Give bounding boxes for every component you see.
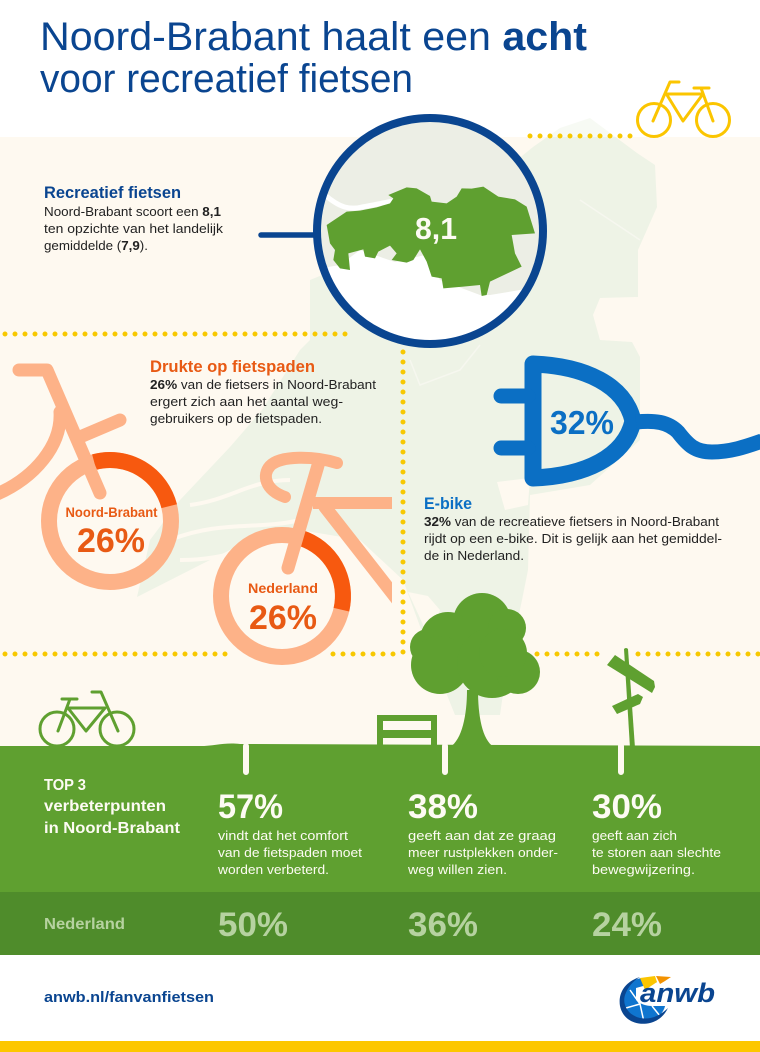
item: 57% comfort	[217, 788, 362, 877]
text: e-bike: de in Nederland.	[424, 548, 524, 563]
icon: e-bike plug	[501, 364, 760, 478]
item: 30% signage	[592, 788, 721, 877]
icon: signpost	[607, 648, 655, 748]
logo: anwb: anwb	[640, 978, 715, 1008]
row: Nederland comparison: 24%	[592, 906, 662, 944]
score 8,1: 8,1	[415, 211, 457, 246]
text: drukte op fietspaden	[150, 358, 376, 426]
item: 38% rest places: geeft aan dat ze graag	[408, 828, 556, 843]
footer link: anwb.nl/fanvanfietsen	[44, 989, 214, 1006]
item: 38% rest places: weg willen zien.	[407, 862, 507, 877]
text: recreatief fietsen: Recreatief fietsen	[44, 184, 181, 202]
text: drukte op fietspaden: Drukte op fietspaden	[150, 358, 315, 376]
text: recreatief fietsen: Noord-Brabant scoort een 8,1	[44, 204, 221, 219]
text: recreatief fietsen: gemiddelde (7,9).	[44, 238, 148, 253]
text: e-bike: 32% van de recreatieve fietsers in Noord-Brabant	[424, 514, 719, 529]
connector line to map lens	[261, 232, 318, 238]
panel: top 3 improvements	[0, 743, 760, 955]
row: Nederland comparison	[44, 906, 662, 944]
title: Noord-Brabant haalt een acht	[40, 15, 587, 59]
text: e-bike: E-bike	[424, 495, 472, 513]
text: recreatief fietsen	[44, 184, 224, 253]
item: 57% comfort: vindt dat het comfort	[218, 828, 348, 843]
chart: Nederland donut with bicycle fork: 26%	[249, 599, 317, 637]
item: 30% signage: bewegwijzering.	[592, 862, 695, 877]
icon: yellow bicycle	[638, 82, 730, 136]
item: 30% signage: te storen aan slechte	[592, 845, 721, 860]
heading: top 3: verbeterpunten	[44, 798, 166, 815]
text: drukte op fietspaden: ergert zich aan het aantal weg-	[150, 394, 343, 409]
yellow dotted dividers	[5, 136, 760, 655]
title: voor recreatief fietsen	[40, 57, 413, 101]
icon: e-bike plug: 32%	[550, 404, 614, 441]
chart: Nederland donut with bicycle fork	[221, 458, 400, 657]
heading: top 3	[44, 777, 180, 837]
title	[40, 15, 587, 101]
chart: Noord-Brabant donut with bicycle fork: Noord-Brabant	[66, 505, 158, 520]
background map of the Netherlands	[137, 100, 700, 715]
item: 38% rest places: 38%	[408, 788, 478, 826]
row: Nederland comparison: 50%	[218, 906, 288, 944]
row: Nederland comparison: 36%	[408, 906, 478, 944]
chart: Noord-Brabant donut with bicycle fork: 26%	[77, 522, 145, 560]
footer bar	[0, 1041, 760, 1052]
item: 57% comfort: worden verbeterd.	[217, 862, 329, 877]
text: e-bike	[424, 495, 722, 563]
chart: Noord-Brabant donut with bicycle fork	[0, 370, 171, 582]
text: e-bike: rijdt op een e-bike. Dit is gelijk aan het gemiddel-	[424, 531, 722, 546]
item: 30% signage: geeft aan zich	[592, 828, 677, 843]
logo: anwb	[620, 976, 715, 1024]
icon: bench	[377, 715, 437, 748]
item: 57% comfort: van de fietspaden moet	[218, 845, 362, 860]
heading: top 3: in Noord-Brabant	[44, 820, 180, 837]
item: 38% rest places: meer rustplekken onder-	[408, 845, 558, 860]
text: drukte op fietspaden: gebruikers op de fietspaden.	[150, 411, 322, 426]
item: 38% rest places	[407, 788, 558, 877]
chart: Nederland donut with bicycle fork: Nederland	[248, 581, 318, 596]
heading: top 3: TOP 3	[44, 777, 86, 794]
row: Nederland comparison: Nederland	[44, 916, 125, 933]
icon: green bicycle	[40, 692, 134, 746]
icon: tree	[410, 593, 540, 747]
map lens with Noord-Brabant	[313, 114, 547, 348]
text: recreatief fietsen: ten opzichte van het landelijk	[44, 221, 224, 236]
item: 57% comfort: 57%	[218, 788, 283, 826]
text: drukte op fietspaden: 26% van de fietsers in Noord-Brabant	[150, 377, 376, 392]
Noord-Brabant shape	[327, 187, 535, 296]
item: 30% signage: 30%	[592, 788, 662, 826]
